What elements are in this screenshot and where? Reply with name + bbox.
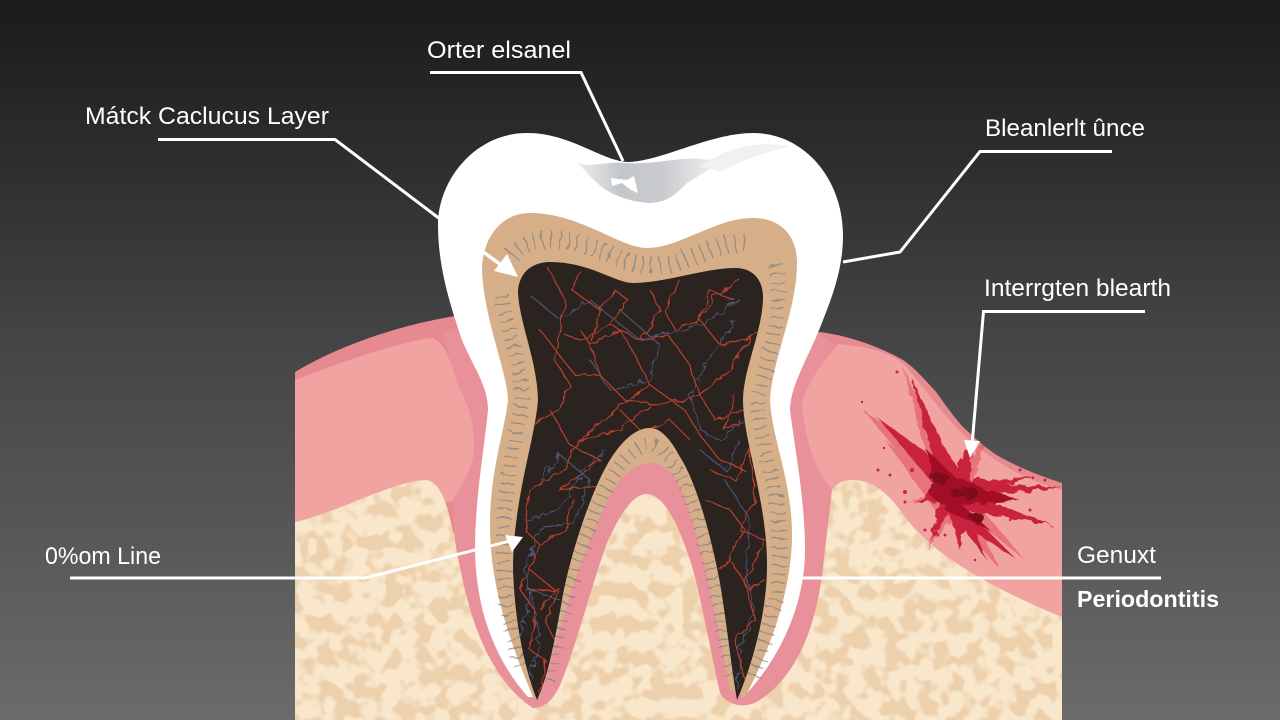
groove mark (611, 176, 638, 193)
dentin layer (482, 213, 797, 697)
dentin tubules (501, 239, 780, 680)
label: Periodontitis: Periodontitis (1077, 586, 1219, 612)
label: Bleanlerlt ûnce (843, 115, 1145, 262)
label: Mátck Caclucus Layer: Mátck Caclucus Layer (85, 103, 329, 130)
tooth enamel (438, 133, 843, 697)
pulp chamber (513, 262, 767, 700)
label: Orter elsanel (427, 37, 623, 161)
label: Interrgten blearth: Interrgten blearth (984, 275, 1171, 302)
label: Interrgten blearth (964, 275, 1171, 458)
label: Mátck Caclucus Layer (85, 103, 440, 219)
label: Orter elsanel: Orter elsanel (427, 37, 571, 64)
pulp blood vessels and nerves (520, 268, 765, 700)
label: Genuxt: Genuxt (1077, 542, 1156, 569)
alveolar bone (295, 470, 1062, 720)
occlusal groove shading (577, 159, 720, 203)
gum tissue (295, 316, 1062, 720)
label: 0%om Line: 0%om Line (45, 543, 161, 570)
label: Bleanlerlt ûnce: Bleanlerlt ûnce (985, 115, 1145, 142)
periodontal tissue around roots (442, 320, 835, 708)
bleeding inflammation (861, 367, 1062, 570)
label: 0%om Line (45, 535, 523, 578)
enamel highlight (700, 144, 790, 172)
arrow: dentin pointer (482, 251, 518, 277)
